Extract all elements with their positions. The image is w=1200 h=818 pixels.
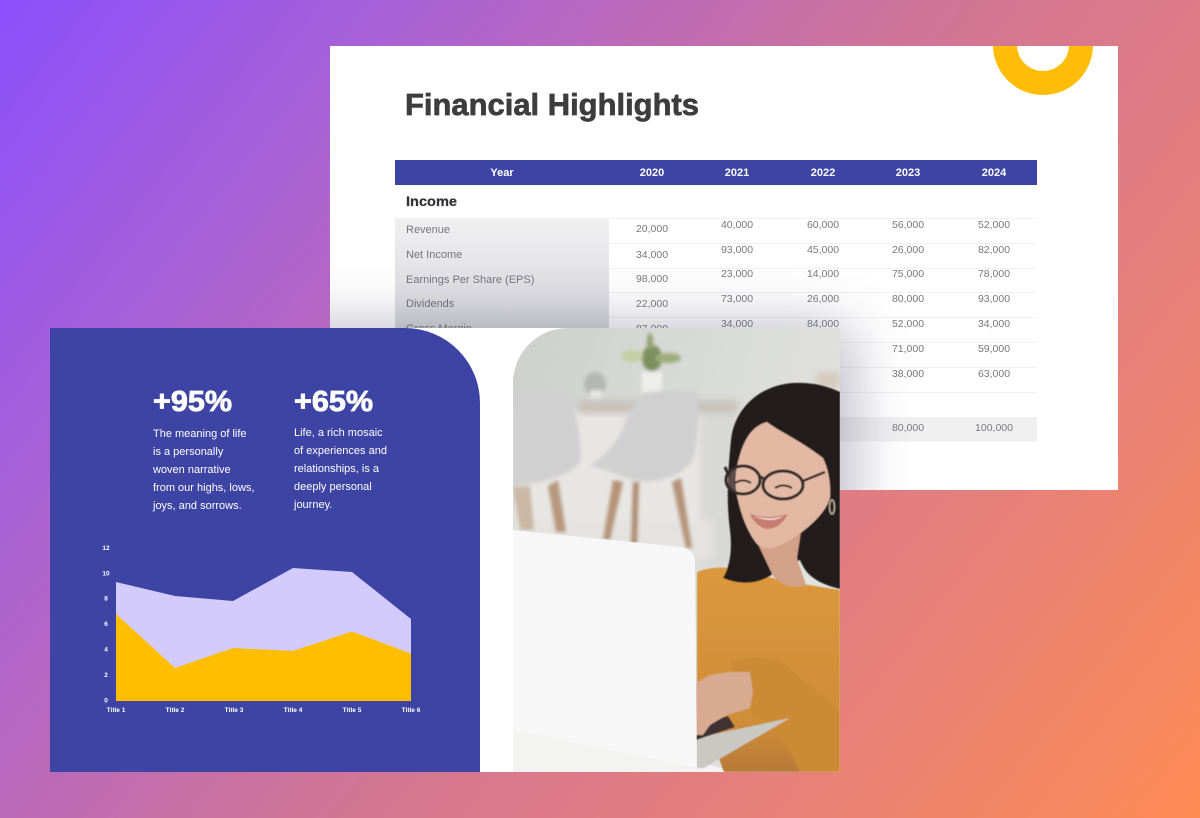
x axis labels: Title 6	[402, 707, 421, 714]
stat: +65%	[293, 386, 387, 511]
row labels: Earnings Per Share (EPS)	[406, 274, 534, 286]
table values: 82,000	[978, 244, 1010, 256]
soft shadow cast by front slide	[330, 294, 884, 490]
table header: Year	[490, 167, 514, 179]
table values: 23,000	[721, 268, 753, 280]
stat: +65%: +65%	[294, 386, 373, 418]
row label column	[395, 218, 609, 442]
table header	[395, 160, 1037, 185]
table values: 22,000	[636, 298, 668, 310]
table header: 2020	[640, 167, 664, 179]
y axis labels: 0	[104, 698, 108, 704]
table values: 38,000	[892, 368, 924, 380]
table values: 52,000	[978, 219, 1010, 231]
blurred room	[513, 372, 840, 565]
row labels	[406, 224, 534, 335]
blurred vase, kettle and plant	[584, 333, 681, 398]
area chart	[102, 545, 421, 714]
table values: 80,000	[892, 422, 924, 434]
y axis labels: 2	[104, 672, 108, 679]
row labels: Dividends	[406, 298, 455, 310]
table values: 93,000	[978, 293, 1010, 305]
table values: 87,000	[636, 323, 668, 335]
table header: 2021	[725, 167, 749, 179]
y axis labels: 8	[104, 596, 108, 602]
table values: 98,000	[636, 273, 668, 285]
table values: 45,000	[807, 244, 839, 256]
glasses	[726, 466, 803, 499]
table values: 93,000	[721, 244, 753, 256]
earring	[830, 500, 834, 514]
table values: 14,000	[807, 268, 839, 280]
stat: +65%: Life, a rich mosaic	[294, 427, 383, 439]
yellow area series	[116, 614, 411, 701]
table values: 26,000	[892, 244, 924, 256]
x axis labels: Title 5	[343, 707, 362, 714]
table values: 71,000	[892, 343, 924, 355]
x axis labels: Title 4	[284, 707, 303, 714]
table values: 26,000	[807, 293, 839, 305]
stat: +65%: deeply personal	[294, 481, 372, 493]
sleeve	[730, 657, 840, 772]
table header: 2023	[896, 167, 920, 179]
smile	[750, 514, 788, 529]
table values: 56,000	[892, 219, 924, 231]
y axis labels	[102, 545, 110, 704]
hair parting shadow	[767, 422, 823, 458]
x axis labels: Title 2	[166, 707, 185, 714]
stat: +65%: relationships, is a	[294, 463, 380, 475]
y axis labels: 6	[104, 621, 108, 628]
stat: +95%: is a personally	[153, 446, 224, 458]
y axis labels: 10	[102, 570, 110, 578]
eyes	[735, 480, 792, 488]
title: Financial Highlights	[405, 87, 699, 122]
stat: +95%	[152, 386, 254, 512]
photo: woman using a laptop	[513, 328, 840, 772]
stat: +95%: woven narrative	[152, 464, 231, 476]
stat: +95%: joys, and sorrows.	[152, 500, 242, 512]
table values: 63,000	[978, 368, 1010, 380]
table values: 59,000	[978, 343, 1010, 355]
table values: 34,000	[636, 249, 668, 261]
table values: 73,000	[721, 293, 753, 305]
table values: 40,000	[721, 219, 753, 231]
table values: 75,000	[892, 268, 924, 280]
row labels: Gross Margin	[406, 323, 472, 335]
panel: financial highlights slide	[330, 0, 1118, 490]
table header: 2022	[811, 167, 835, 179]
x axis labels	[107, 707, 421, 714]
table values: 100,000	[975, 422, 1013, 434]
y axis labels: 12	[102, 545, 110, 552]
panel: blue statistics card	[50, 328, 480, 772]
table header: 2024	[982, 167, 1007, 179]
table	[395, 160, 1037, 442]
row labels: Revenue	[406, 224, 450, 236]
sweater	[696, 383, 840, 772]
hair	[723, 383, 840, 589]
table surface	[513, 730, 724, 772]
laptop keyboard base	[696, 718, 790, 768]
table values: 60,000	[807, 219, 839, 231]
stat: +95%: The meaning of life	[153, 428, 247, 440]
table values	[636, 219, 1013, 434]
icon: yellow ring	[993, 46, 1093, 95]
blurred chairs	[513, 390, 698, 548]
table values: 20,000	[636, 223, 668, 235]
table values: 34,000	[978, 318, 1010, 330]
stat: +65%: journey.	[293, 499, 332, 511]
income section heading: Income	[406, 193, 457, 209]
stat: +65%: of experiences and	[294, 445, 387, 457]
stat: +95%: +95%	[153, 386, 232, 418]
table values: 34,000	[721, 318, 753, 330]
neck	[758, 532, 806, 588]
panel: front slide	[50, 328, 840, 772]
lavender area series	[116, 568, 411, 701]
face	[736, 422, 830, 548]
shading over the row label column	[395, 218, 609, 328]
x axis labels: Title 3	[225, 707, 244, 714]
table values: 52,000	[892, 318, 924, 330]
table values: 78,000	[978, 268, 1010, 280]
laptop lid	[513, 530, 697, 768]
x axis labels: Title 1	[107, 707, 126, 714]
row labels: Net Income	[406, 249, 462, 261]
table values: 84,000	[807, 318, 839, 330]
total row band	[395, 417, 1037, 442]
hand	[696, 672, 753, 735]
stat: +95%: from our highs, lows,	[153, 482, 254, 494]
table values: 80,000	[892, 293, 924, 305]
y axis labels: 4	[104, 646, 108, 654]
